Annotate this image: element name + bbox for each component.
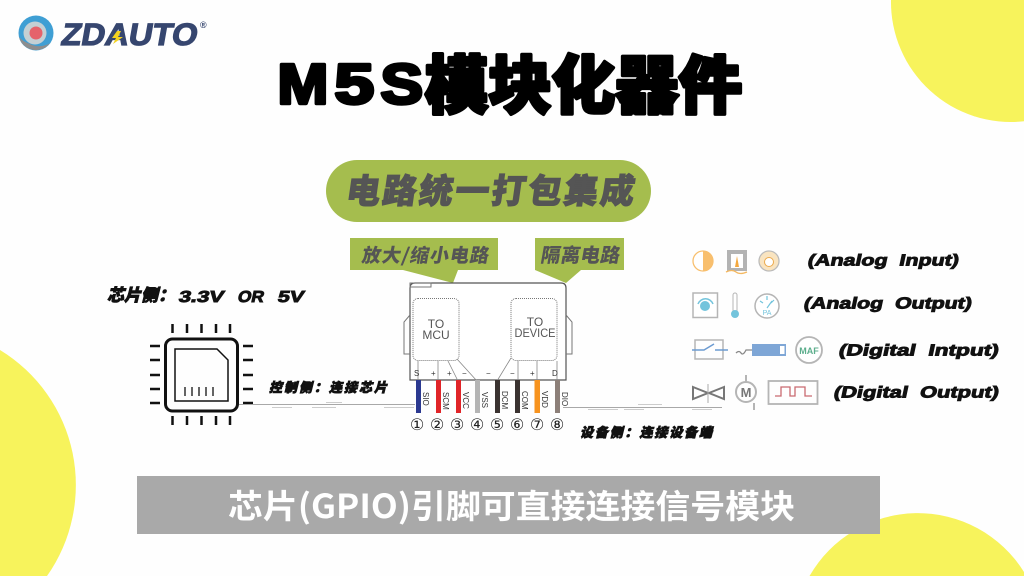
connection line: chip to module <box>239 402 415 408</box>
pin numbers: ② <box>430 415 444 434</box>
pin numbers: ④ <box>470 415 484 434</box>
logo: ZDAUTO <box>18 16 207 52</box>
module diagram: − <box>462 369 467 378</box>
title <box>278 36 742 127</box>
label: device side: 设备侧：连接设备端 <box>579 424 715 440</box>
icons: digital input <box>692 337 822 363</box>
icons: analog output <box>693 293 779 318</box>
module diagram: + <box>431 369 436 378</box>
icon: MAF sensor: MAF <box>799 346 819 356</box>
box: to device: DEVICE <box>514 326 556 340</box>
icon: flame gauge <box>726 250 747 274</box>
icon: half circle <box>693 251 713 271</box>
icon: valve <box>693 384 724 403</box>
icon: proximity sensor <box>736 344 786 356</box>
module diagram: − <box>510 369 515 378</box>
icon: chip <box>150 324 253 425</box>
title: S <box>380 52 423 116</box>
pin polarity marks: S <box>414 369 419 378</box>
icon: rotary output <box>693 293 718 318</box>
heading pill: circuit integration: 电路统一打包集成 <box>344 163 639 213</box>
pin names <box>421 391 569 410</box>
icon: lightning bolt <box>112 31 123 44</box>
pin names: SIO <box>421 392 430 406</box>
callout: isolation circuit <box>535 238 624 283</box>
pin numbers: ⑧ <box>550 415 564 434</box>
pin numbers: ① <box>410 415 424 434</box>
icon: logo sphere <box>18 16 54 50</box>
icon: thermometer <box>731 293 739 318</box>
module body <box>410 283 566 380</box>
label: chip side voltage: 3.3V <box>177 288 226 306</box>
callout: isolation circuit: 隔离电路 <box>539 239 623 268</box>
callout: amplify/reduce circuit: 放大/缩小电路 <box>360 240 492 268</box>
pin names: DCM <box>500 391 509 410</box>
module diagram: D <box>552 369 558 378</box>
pin names: SCM <box>441 392 450 410</box>
pin names: DIO <box>560 392 569 406</box>
banner: GPIO direct connection: 芯片(GPIO)引脚可直接连接信号模块 <box>228 480 795 528</box>
icons: analog input <box>693 250 779 274</box>
icons: digital output <box>693 375 818 410</box>
module diagram: − <box>486 369 491 378</box>
decorative circle: top right <box>891 0 1024 122</box>
icon: switch <box>692 340 728 359</box>
pin names: VCC <box>461 392 470 409</box>
box: to device: TO <box>527 315 543 329</box>
callout: amplify/reduce circuit <box>350 238 498 283</box>
title: M <box>278 52 328 116</box>
pin names: VSS <box>480 392 489 408</box>
decorative circle: bottom left <box>0 350 76 576</box>
module diagram <box>404 283 572 434</box>
icon: square wave <box>768 381 818 404</box>
pin names: VDD <box>540 391 549 408</box>
label: chip side voltage: 芯片侧： <box>106 285 179 305</box>
label: control side: 控制侧：连接芯片 <box>268 379 390 395</box>
box: to device <box>511 298 557 360</box>
internal wires <box>418 358 557 381</box>
box: to MCU <box>413 298 459 360</box>
pin numbers: ③ <box>450 415 464 434</box>
label: chip side voltage: 5V <box>276 288 306 306</box>
icon: motor: M <box>741 385 751 400</box>
banner: GPIO direct connection <box>137 476 880 534</box>
icon: pressure gauge: PA <box>763 310 772 317</box>
pin names: COM <box>520 391 529 410</box>
label: digital output: (Digital Output) <box>832 384 1001 401</box>
label: chip side voltage: OR <box>236 288 266 306</box>
module diagram: + <box>447 369 452 378</box>
pin numbers: ⑥ <box>510 415 524 434</box>
label: chip side voltage <box>106 285 306 306</box>
module diagram: + <box>530 369 535 378</box>
title: 5 <box>334 52 374 116</box>
pins <box>416 380 560 413</box>
decorative circle: bottom right <box>810 513 1024 576</box>
label: digital input: (Digital Intput) <box>837 342 1001 359</box>
connection line: module to devices <box>563 404 722 410</box>
registered mark: ® <box>200 20 207 30</box>
title: 模块化器件 <box>425 36 742 127</box>
box: to MCU: MCU <box>422 328 450 342</box>
module tabs <box>404 283 572 354</box>
pin numbers <box>410 415 564 434</box>
logo wordmark: ZDAUTO <box>59 17 201 52</box>
pin numbers: ⑦ <box>530 415 544 434</box>
label: analog output: (Analog Output) <box>802 295 974 312</box>
label: analog input: (Analog Input) <box>806 252 961 269</box>
icon: light bulb dial <box>759 251 779 271</box>
box: to MCU: TO <box>428 317 444 331</box>
pin numbers: ⑤ <box>490 415 504 434</box>
